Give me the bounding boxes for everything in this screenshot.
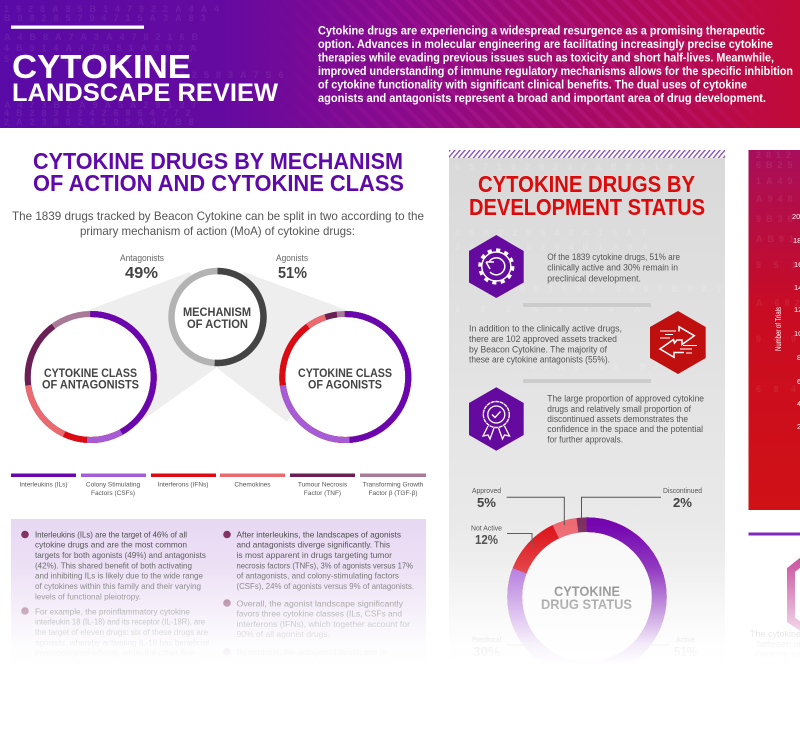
left column text: For example, the proinflammatory cytokine bbox=[35, 606, 190, 616]
text: clinically active bbox=[547, 252, 680, 284]
title rule bbox=[11, 26, 144, 29]
callout: not active: 12% bbox=[475, 532, 498, 547]
donut: cytokine drug status bbox=[515, 525, 659, 669]
left column text: immunological effects, while the other five bbox=[35, 648, 194, 658]
left column text: Interleukins (ILs) are the target of 46% of all bbox=[35, 529, 187, 539]
donut: class of agonists bbox=[282, 314, 408, 440]
panel: development status: 3A7185294B1A8A bbox=[455, 242, 657, 252]
right column text: After interleukins, the landscapes of agonists bbox=[236, 529, 401, 539]
header banner: 5941258A69157A26 bbox=[4, 54, 199, 64]
intro paragraph: primary mechanism of action (MoA) of cytokine drugs: bbox=[80, 224, 355, 238]
intro text: agonists and antagonists represent a broad and important area of drug development. bbox=[318, 93, 766, 105]
header banner: 1928A85B147922A4A4 bbox=[4, 4, 226, 14]
header banner: 4B914A47B51A892A bbox=[4, 43, 204, 53]
intro text: Cytokine drugs are experiencing a widespread resurgence as a promising therapeutic bbox=[318, 26, 766, 38]
callout: preclinical: Preclinical bbox=[472, 635, 501, 644]
panel: trials chart: 6 8 4 bbox=[756, 384, 800, 394]
text: clinically active: preclinical development. bbox=[547, 274, 641, 284]
left column text: the target of eleven drugs: six of these drugs are bbox=[35, 627, 208, 637]
legend bbox=[11, 474, 426, 497]
right column text: favors three cytokine classes (ILs, CSFs and bbox=[236, 609, 402, 619]
header banner: A4B8A7A3A478216B bbox=[4, 32, 205, 42]
heading: mechanism of action: CYTOKINE DRUGS BY MECHANISM bbox=[33, 148, 403, 174]
text: approvals potential bbox=[547, 394, 704, 444]
callout: discontinued: 2% bbox=[673, 495, 692, 510]
icon: award badge bbox=[469, 387, 524, 451]
rule: lower right panel bbox=[748, 532, 800, 536]
antagonists label: Antagonists bbox=[120, 253, 164, 263]
header banner: 92583A7S6 bbox=[180, 70, 291, 80]
header banner: B98285794715A3A83 bbox=[4, 13, 213, 23]
intro text: of cytokine functionality with significant clinical benefits. The dual uses of cytokine bbox=[318, 80, 747, 92]
donut: cytokine drug status: CYTOKINE bbox=[554, 583, 620, 599]
legend: Factors (CSFs) bbox=[91, 490, 135, 497]
antagonists label bbox=[120, 253, 164, 282]
left column text: interleukin 18 (IL-18) and its receptor (IL-18R), are bbox=[35, 617, 205, 627]
panel: development status: 882599 3367B8A2 bbox=[520, 284, 731, 294]
text: lower right panel: drugs that bbox=[758, 659, 799, 669]
heading: development status bbox=[469, 171, 705, 220]
legend: Factor β (TGF-β) bbox=[368, 490, 418, 497]
legend: Factor (TNF) bbox=[304, 490, 341, 497]
donut: mechanism of action: MECHANISM bbox=[183, 305, 251, 319]
header banner bbox=[0, 0, 800, 128]
heading: development status: CYTOKINE DRUGS BY bbox=[478, 171, 695, 197]
heading: mechanism of action: OF ACTION AND CYTOKINE CLASS bbox=[33, 170, 404, 196]
panel: trials chart: 1A49 bbox=[756, 176, 798, 186]
donut: class of agonists: OF AGONISTS bbox=[308, 378, 382, 392]
legend: Chemokines bbox=[234, 482, 271, 488]
left column text bbox=[35, 529, 209, 668]
callout: not active bbox=[471, 524, 532, 547]
callout: preclinical bbox=[472, 635, 531, 659]
agonists label: 51% bbox=[278, 265, 307, 282]
right column text: (CSFs), 24% of agonists versus 9% of antagonists. bbox=[236, 581, 414, 591]
right column text: and antagonists diverge significantly. This bbox=[236, 540, 390, 550]
callout: approved: 5% bbox=[477, 495, 496, 510]
text: approvals potential: The large proportion of approved cytokine bbox=[547, 394, 704, 404]
axis ticks bbox=[792, 212, 800, 431]
title: CYTOKINE bbox=[12, 48, 191, 85]
text: approved assets: these are cytokine antagonists (55%). bbox=[469, 355, 610, 365]
header banner: 4B28312426864772 bbox=[4, 108, 198, 118]
text: approved assets: there are 102 approved assets tracked bbox=[469, 334, 617, 344]
text: approvals potential: confidence in the space and the potential bbox=[547, 424, 703, 434]
panel: trials chart bbox=[748, 150, 800, 510]
donut: class of antagonists: CYTOKINE CLASS bbox=[44, 366, 137, 380]
right column text: Overall, the agonist landscape significantly bbox=[236, 599, 404, 609]
legend: Interferons (IFNs) bbox=[158, 482, 208, 488]
text: lower right panel bbox=[750, 629, 800, 669]
panel: development status: 85A729643A18A7 bbox=[455, 228, 656, 238]
text: approved assets bbox=[469, 324, 622, 365]
right column text bbox=[236, 529, 414, 668]
callout: discontinued: Discontinued bbox=[663, 486, 702, 495]
intro text bbox=[318, 26, 793, 105]
heading: development status: DEVELOPMENT STATUS bbox=[469, 194, 705, 220]
right column text: dispersed more evenly among the other bbox=[236, 658, 390, 668]
heading: mechanism of action bbox=[33, 148, 404, 196]
text: approvals potential: for further approvals. bbox=[547, 434, 623, 444]
header banner: 2A238824195A47B8 bbox=[4, 117, 201, 127]
intro text: therapies while evading previous issues such as toxicity and short half-lives. Meanwhile, bbox=[318, 52, 774, 64]
antagonists label: 49% bbox=[125, 265, 158, 282]
right column text: interferons (IFNs), which together account for bbox=[236, 619, 410, 629]
icon: outlined hexagon bbox=[791, 551, 800, 636]
icon: exchange arrows bbox=[650, 311, 706, 374]
left column text: of cytokines within this family and their varying bbox=[35, 581, 201, 591]
icon: gear cycle bbox=[469, 235, 524, 298]
title bbox=[12, 48, 278, 107]
text: approvals potential: discontinued assets demonstrates the bbox=[547, 414, 688, 424]
intro text: option. Advances in molecular engineering are facilitating increasingly precise cytokine bbox=[318, 39, 773, 51]
panel: trials chart: 9 6 9 bbox=[756, 334, 800, 344]
left column text: targets for both agonists (49%) and antagonists bbox=[35, 550, 206, 560]
panel: development status: 6 8 2 A 5 4 8 A bbox=[455, 304, 650, 314]
panel: cytokine class text bbox=[11, 519, 426, 669]
axis label: Number of Trials bbox=[774, 307, 783, 351]
legend: Interleukins (ILs) bbox=[19, 482, 68, 488]
text: approvals potential: drugs and relatively small proportion of bbox=[547, 404, 691, 414]
text: approved assets: by Beacon Cytokine. The majority of bbox=[469, 344, 607, 354]
callout: discontinued bbox=[582, 486, 702, 520]
donut: cytokine drug status: DRUG STATUS bbox=[541, 596, 632, 612]
left column text: (42%). This shared benefit of both activating bbox=[35, 560, 192, 570]
intro paragraph: The 1839 drugs tracked by Beacon Cytokine can be split in two according to the bbox=[12, 209, 424, 223]
panel: trials chart: 9B36 bbox=[756, 214, 798, 224]
donut: class of agonists: CYTOKINE CLASS bbox=[298, 366, 392, 380]
connecting wedges bbox=[83, 272, 352, 422]
left column text: cytokine drugs and are the most common bbox=[35, 540, 187, 550]
callout: approved: Approved bbox=[472, 486, 501, 495]
left column text: drugs are antagonists, in which case inhibiting bbox=[35, 658, 201, 668]
callout: active: 51% bbox=[674, 644, 697, 659]
callout: not active: Not Active bbox=[471, 524, 502, 533]
right column text: 90% of all agonist drugs. bbox=[236, 629, 330, 639]
callout: active bbox=[650, 635, 697, 659]
agonists label: Agonists bbox=[276, 253, 308, 263]
legend: Tumour Necrosis bbox=[298, 482, 348, 488]
callout: approved bbox=[472, 486, 564, 525]
title: LANDSCAPE REVIEW bbox=[12, 79, 278, 107]
text: clinically active: Of the 1839 cytokine drugs, 51% are bbox=[547, 252, 680, 262]
left column text: and inhibiting ILs is likely due to the wide range bbox=[35, 571, 203, 581]
header banner: A473B2A9A5A29137 bbox=[4, 100, 204, 110]
legend: Transforming Growth bbox=[363, 482, 424, 488]
callout: active: Active bbox=[676, 635, 695, 644]
right column text: is most apparent in drugs targeting tumor bbox=[236, 550, 392, 560]
right column text: necrosis factors (TNFs), 3% of agonists versus 17% bbox=[236, 560, 413, 570]
donut: mechanism of action bbox=[172, 271, 264, 363]
right column text: By contrast, the antagonist landscape is bbox=[236, 647, 386, 657]
left column text: agonists, whereby activating IL-18 has beneficial bbox=[35, 637, 209, 647]
panel: development status: 6571929247AB8318 bbox=[455, 162, 682, 172]
panel: development status bbox=[449, 150, 731, 670]
intro paragraph bbox=[12, 209, 424, 238]
donut: class of antagonists bbox=[28, 314, 154, 440]
text: clinically active: clinically active and 30% remain in bbox=[547, 262, 678, 272]
left column text: levels of functional pleiotropy. bbox=[35, 591, 141, 601]
panel: trials chart: 6B25 bbox=[756, 160, 798, 170]
right column text: of antagonists, and colony-stimulating factors bbox=[236, 571, 399, 581]
agonists label bbox=[276, 253, 308, 282]
legend: Colony Stimulating bbox=[86, 482, 140, 488]
bottom fade overlay bbox=[0, 525, 800, 665]
panel: trials chart: A948 bbox=[756, 194, 798, 204]
panel: trials chart: 2812 bbox=[756, 150, 796, 160]
panel: trials chart: AB91 bbox=[756, 234, 799, 244]
donut: mechanism of action: OF ACTION bbox=[187, 317, 248, 331]
bullets bbox=[21, 531, 231, 655]
text: approved assets: In addition to the clinically active drugs, bbox=[469, 324, 622, 334]
panel: development status: 49A6 8A 97A bbox=[530, 362, 683, 372]
callout: preclinical: 30% bbox=[473, 644, 500, 659]
donut: class of antagonists: OF ANTAGONISTS bbox=[42, 378, 139, 392]
